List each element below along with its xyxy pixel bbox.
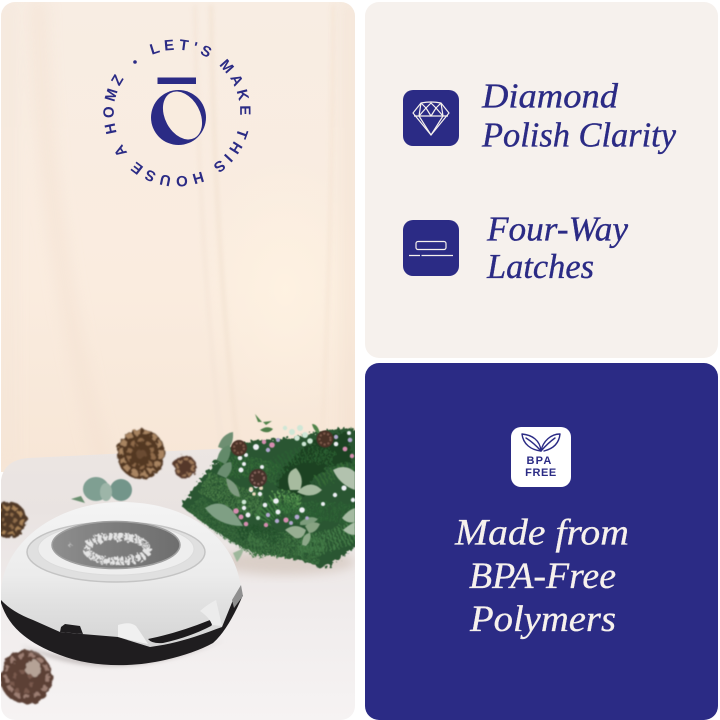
wreath (180, 414, 360, 575)
heading: made from BPA-free polymers: Made from (454, 512, 629, 554)
feature: four-way latches (403, 210, 637, 286)
wreath foliage (180, 428, 360, 568)
soft contact shadow (26, 645, 211, 668)
pink and white gypsophila blossoms (233, 425, 355, 527)
panel: BPA free (365, 363, 718, 720)
lid latches and handle (60, 585, 243, 644)
window wreath motif (68, 536, 147, 562)
heading: made from BPA-free polymers: Polymers (469, 599, 616, 640)
panel: product photo (1, 2, 355, 720)
icon: large pinecone (117, 429, 165, 479)
panel: features (365, 2, 718, 358)
container black base (1, 595, 243, 665)
pinecones on the table (0, 429, 196, 704)
curtain backdrop (1, 0, 375, 472)
feature: diamond polish clarity (403, 76, 676, 154)
logo mark: o with macron (151, 78, 210, 146)
icon: BPA free leaves badge: FREE (525, 467, 557, 479)
icon: BPA free leaves badge: BPA (526, 455, 552, 467)
heading: four-way latches: Latches (486, 247, 594, 286)
heading: diamond polish clarity: Diamond (481, 76, 619, 116)
icon: diamond (403, 90, 459, 146)
heading: made from BPA-free polymers: BPA-Free (469, 556, 616, 597)
table surface (1, 441, 355, 720)
icon: front pinecone (0, 650, 52, 704)
icon: BPA free leaves badge (511, 427, 571, 487)
product: wreath storage container (1, 502, 243, 666)
wreath shadow (215, 549, 355, 575)
lid recessed ring (27, 522, 205, 582)
container translucent lid (1, 502, 242, 647)
icon: latch (403, 220, 459, 276)
circular tagline: LET'S MAKE THIS HOUSE A HOMZ (103, 39, 250, 186)
eucalyptus sprig on table (71, 477, 132, 503)
pinecones in wreath (231, 430, 334, 487)
lid dark window disc (52, 522, 180, 568)
eucalyptus leaves (205, 414, 355, 562)
heading: diamond polish clarity: Polish Clarity (481, 116, 676, 154)
heading: four-way latches: Four-Way (486, 210, 628, 248)
icon: small pinecone (174, 456, 196, 478)
icon: left edge pinecone (0, 502, 27, 538)
logo badge (103, 39, 250, 186)
